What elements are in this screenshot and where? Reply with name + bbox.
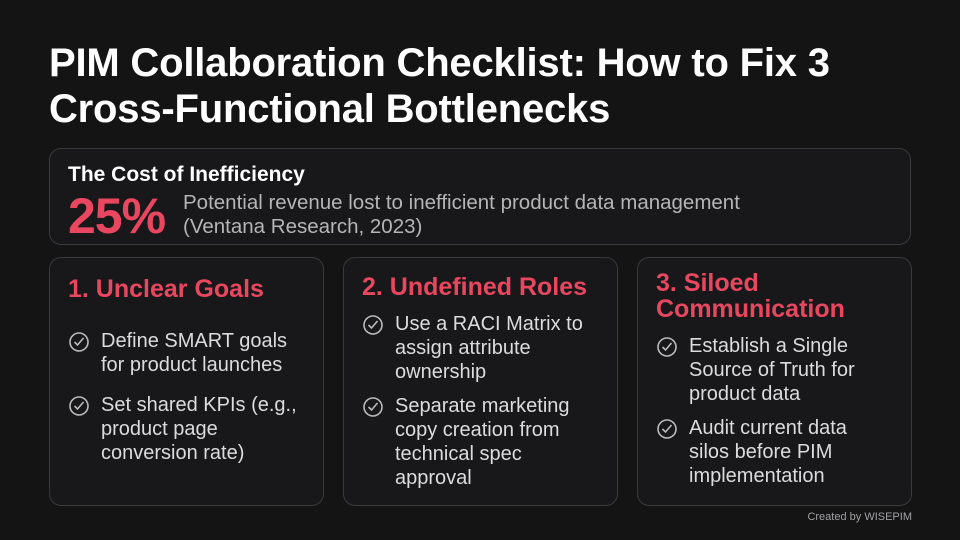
heading: undefined roles: 2. Undefined Roles <box>362 273 587 301</box>
title <box>49 41 830 131</box>
heading: siloed communication <box>656 269 845 323</box>
title: Cross-Functional Bottlenecks <box>49 87 610 131</box>
panel: unclear goals <box>49 257 324 506</box>
panel: cost of inefficiency <box>49 148 911 245</box>
heading: cost: The Cost of Inefficiency <box>68 163 305 186</box>
text: stat description <box>183 191 740 238</box>
panel: undefined roles <box>343 257 618 506</box>
heading: siloed communication: Communication <box>656 295 845 323</box>
checklist item 1: Use a RACI Matrix to assign attribute ownership <box>395 313 583 383</box>
checklist item 1: Establish a Single Source of Truth for product data <box>689 335 855 405</box>
heading: unclear goals: 1. Unclear Goals <box>68 275 264 303</box>
text: stat description: Potential revenue lost to inefficient product data management <box>183 191 740 214</box>
checklist item 1: Define SMART goals for product launches <box>101 330 287 376</box>
stat: 25%: 25% <box>68 188 165 244</box>
credit: Created by WISEPIM <box>807 511 912 523</box>
heading: siloed communication: 3. Siloed <box>656 269 759 297</box>
title: PIM Collaboration Checklist: How to Fix 3 <box>49 41 830 85</box>
panel: siloed communication <box>637 257 912 506</box>
checklist item 2: Set shared KPIs (e.g., product page conversion rate) <box>101 394 297 464</box>
text: stat description: (Ventana Research, 2023) <box>183 215 422 238</box>
checklist item 2: Separate marketing copy creation from technical spec approval <box>395 395 570 489</box>
checklist item 2: Audit current data silos before PIM implementation <box>689 417 847 487</box>
